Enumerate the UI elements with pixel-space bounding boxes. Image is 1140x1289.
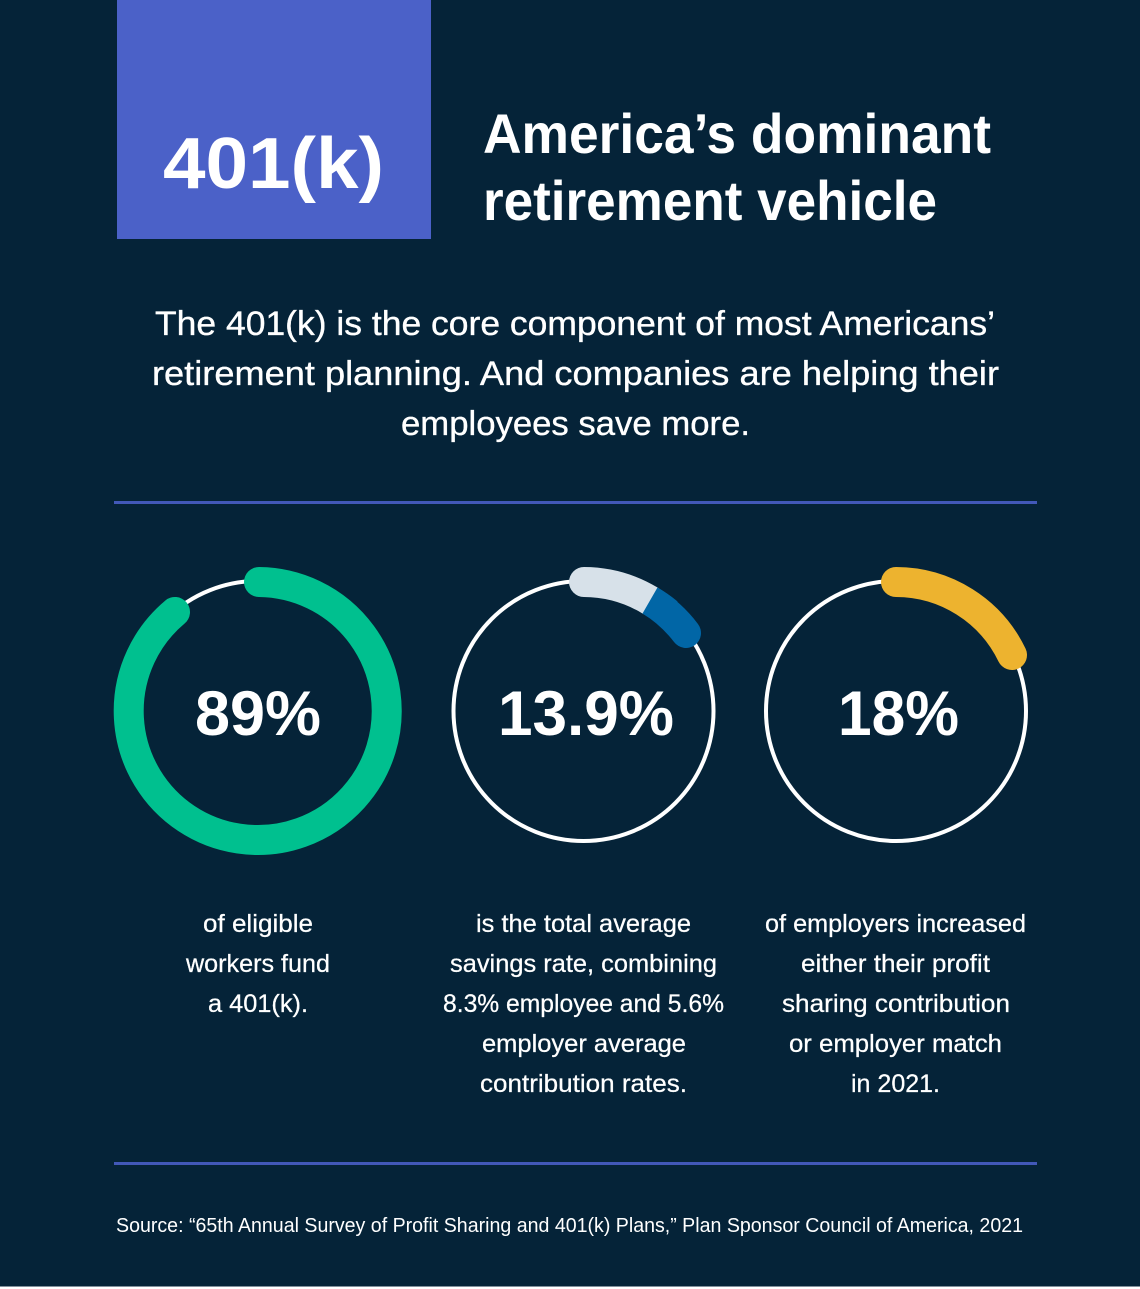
caption: 18%: or employer match [789,1030,1002,1058]
header badge: 401(k) [117,0,431,239]
title: America’s dominant [483,102,991,165]
header badge: 401(k): 401(k) [163,124,384,204]
title [483,102,991,232]
caption: 13.9%: is the total average [476,910,691,938]
source note: Source: “65th Annual Survey of Profit Sharing and 401(k) Plans,” Plan Sponsor Council of America, 2021 [116,1215,1023,1237]
intro paragraph [152,305,999,443]
caption: 18%: either their profit [801,950,990,978]
stat ring: 89%: 89% [195,679,321,749]
caption: 13.9%: savings rate, combining [450,950,717,978]
caption: 18%: of employers increased [765,910,1026,938]
stat ring: 13.9% [454,581,714,841]
stat ring: 18%: 18% [838,679,959,749]
caption: 89%: of eligible [203,910,313,938]
caption: 13.9%: 8.3% employee and 5.6% [443,990,724,1018]
caption: 18% [765,910,1026,1098]
caption: 13.9% [443,910,724,1098]
intro paragraph: The 401(k) is the core component of most Americans’ [155,305,995,343]
stat ring: 89% [128,581,388,841]
intro paragraph: employees save more. [401,405,750,443]
caption: 13.9%: employer average [482,1030,686,1058]
caption: 18%: sharing contribution [782,990,1010,1018]
title: retirement vehicle [483,169,937,232]
intro paragraph: retirement planning. And companies are helping their [152,355,999,393]
caption: 89% [185,910,330,1018]
caption: 18%: in 2021. [851,1070,940,1098]
stat ring: 13.9%: 13.9% [498,679,674,749]
caption: 89%: a 401(k). [208,990,308,1018]
stat ring: 18% [766,581,1026,841]
caption: 13.9%: contribution rates. [480,1070,687,1098]
caption: 89%: workers fund [185,950,330,978]
